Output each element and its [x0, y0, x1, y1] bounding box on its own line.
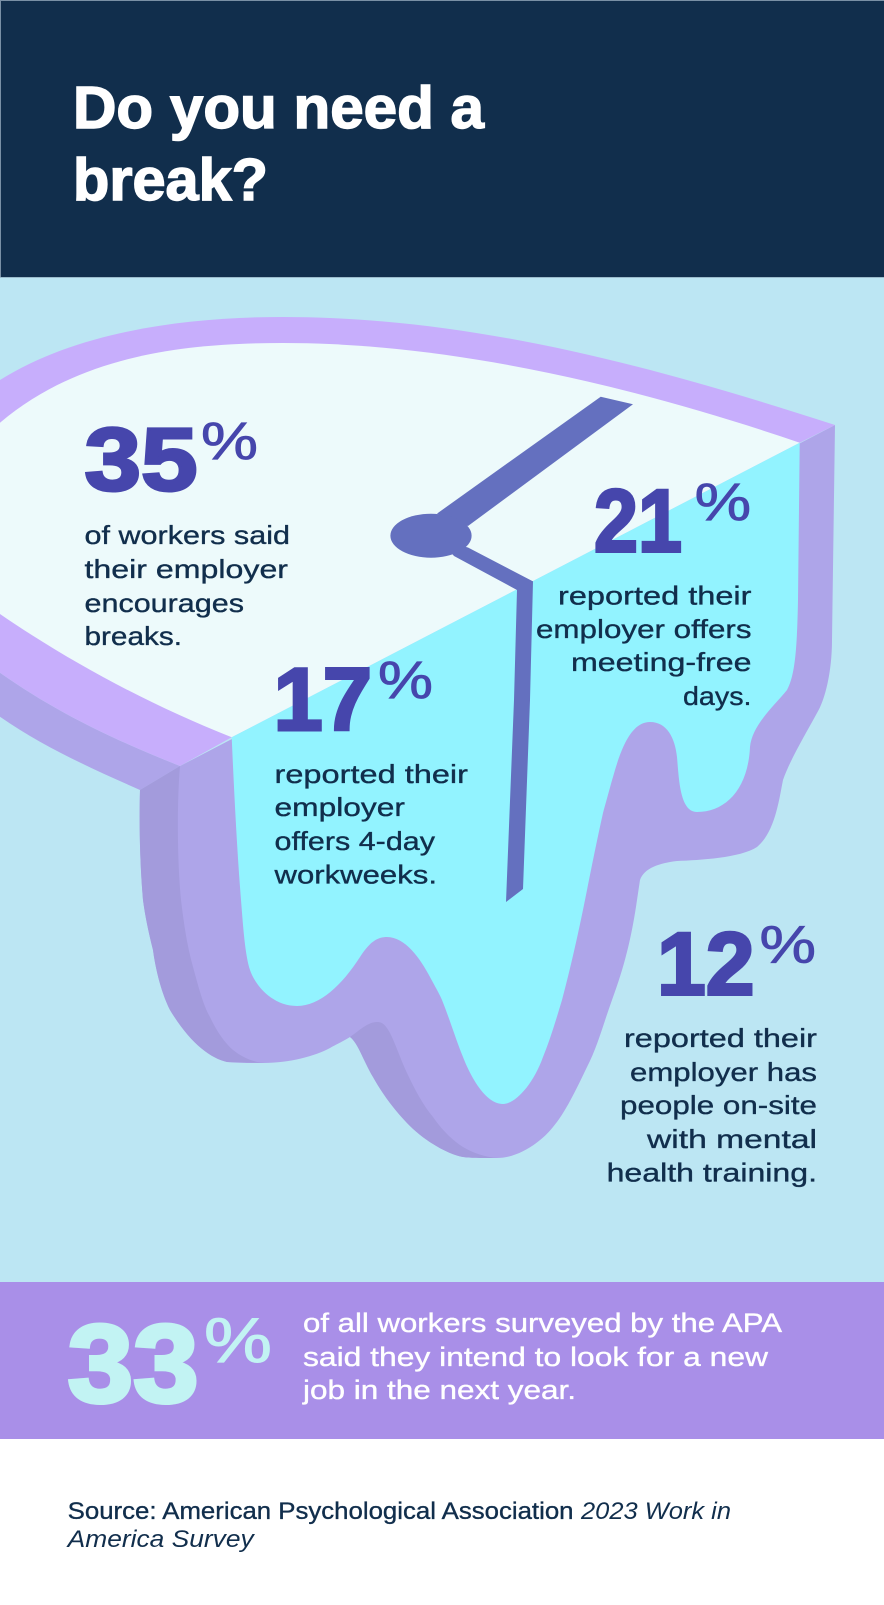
- stat: 12%: with mental: [646, 1124, 817, 1154]
- stat: 21%: days.: [683, 681, 752, 711]
- source note: Source: American Psychological Association: [68, 1498, 573, 1525]
- stat: 21%: %: [695, 473, 751, 532]
- clock illustration: [0, 317, 835, 1158]
- stat: 35%: 35: [84, 409, 198, 509]
- stat: 17%: workweeks.: [273, 860, 437, 890]
- stat: 17%: offers 4-day: [274, 826, 435, 856]
- band text: said they intend to look for a new: [303, 1342, 769, 1372]
- stat: 12%: health training.: [607, 1158, 817, 1188]
- clock face cyan: [232, 443, 800, 1104]
- clock rim: [0, 317, 835, 766]
- stat: 17%: [273, 649, 468, 890]
- title: break?: [73, 147, 268, 213]
- band text: job in the next year.: [302, 1375, 576, 1405]
- stat: 12%: people on-site: [620, 1090, 817, 1120]
- bottom band: 33% stat: [0, 1282, 884, 1439]
- stat: 35%: of workers said: [84, 520, 290, 550]
- band text: of all workers surveyed by the APA: [303, 1308, 782, 1338]
- stat: 21%: employer offers: [536, 614, 752, 644]
- stat: 21%: reported their: [558, 581, 752, 611]
- stat: 12%: 12: [657, 914, 754, 1014]
- clock wall shaded side middle: [350, 1022, 497, 1158]
- stat: 12%: reported their: [624, 1023, 817, 1053]
- clock lower left side: [0, 673, 180, 790]
- source note: [66, 1498, 731, 1553]
- stat: 35%: encourages: [84, 588, 244, 618]
- title: [73, 75, 485, 213]
- clock wall silhouette: [140, 425, 835, 1158]
- clock wall shaded side left: [140, 766, 267, 1063]
- stat: 21%: meeting-free: [571, 647, 752, 677]
- 33 percent figure: [68, 1303, 272, 1426]
- stat: 35%: breaks.: [84, 621, 182, 651]
- 33 percent figure: 33: [68, 1303, 199, 1426]
- stat: 21%: [536, 470, 752, 711]
- clock hands: [390, 397, 633, 902]
- stat: 12%: %: [760, 916, 816, 974]
- page background: [0, 277, 884, 1282]
- clock face white: [0, 343, 800, 737]
- 33 percent figure: %: [204, 1306, 272, 1376]
- stat: 35%: %: [201, 412, 258, 471]
- stat: 17%: 17: [274, 649, 372, 749]
- title: Do you need a: [73, 75, 485, 141]
- stat: 35%: [84, 409, 290, 651]
- source note: America Survey: [66, 1526, 256, 1553]
- stat: 17%: %: [378, 651, 433, 710]
- stat: 35%: their employer: [84, 554, 288, 584]
- stat: 17%: employer: [274, 792, 405, 822]
- stat: 12%: employer has: [630, 1057, 817, 1087]
- band text: [302, 1308, 782, 1405]
- header panel: [0, 0, 884, 278]
- stat: 12%: [607, 914, 817, 1188]
- source note: 2023 Work in: [580, 1498, 731, 1525]
- stat: 21%: 21: [594, 470, 682, 570]
- stat: 17%: reported their: [274, 759, 468, 789]
